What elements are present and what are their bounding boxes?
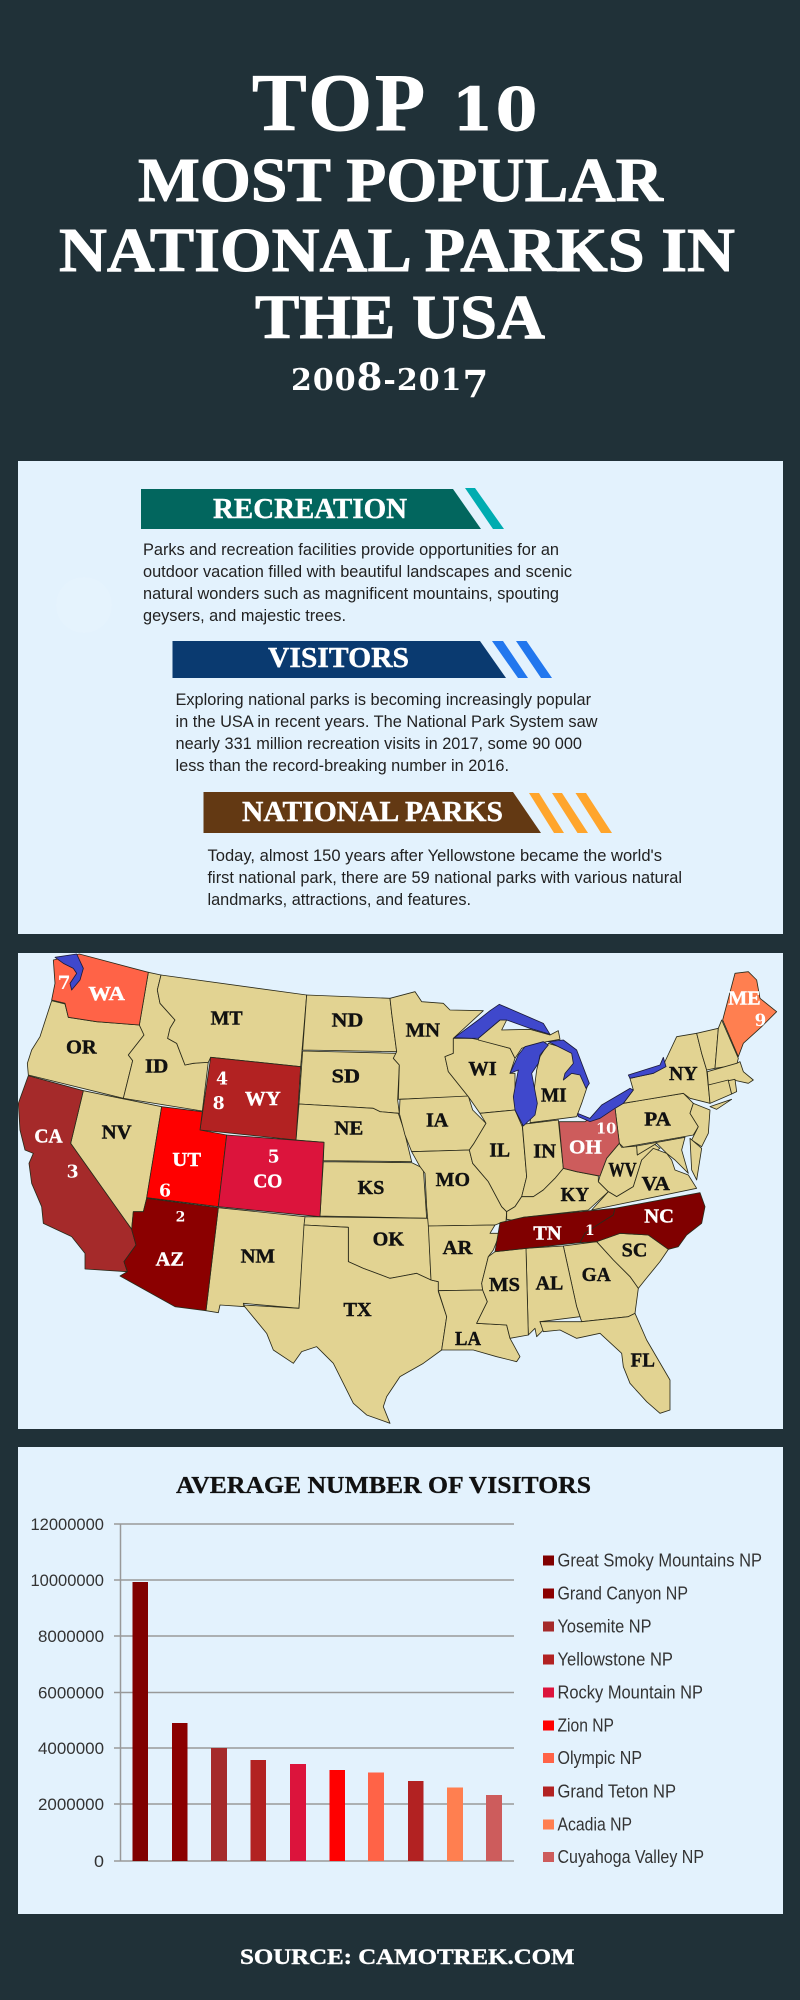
legend: Great Smoky Mountains NP	[558, 1550, 762, 1570]
text: visitors: Exploring national parks is becoming increasingly popular	[176, 690, 591, 709]
rank numbers: 8	[213, 1094, 225, 1114]
tan states	[27, 972, 753, 1423]
legend: Zion NP	[558, 1716, 614, 1736]
title: 10	[452, 75, 540, 144]
state labels: UT	[172, 1149, 202, 1171]
state labels: OK	[373, 1229, 404, 1251]
map of the USA	[18, 954, 777, 1423]
banner: recreation: RECREATION	[213, 493, 407, 525]
state labels: LA	[455, 1328, 482, 1350]
text: national parks	[208, 846, 682, 909]
title: TOP	[252, 57, 424, 148]
state: Washington	[52, 954, 148, 1025]
legend: Grand Canyon NP	[558, 1584, 688, 1604]
banner: visitors	[172, 641, 552, 678]
state labels: NC	[644, 1206, 674, 1228]
banner: national parks: NATIONAL PARKS	[242, 796, 503, 828]
state labels: TX	[343, 1299, 372, 1321]
state: California	[18, 1076, 136, 1272]
state labels: MT	[211, 1007, 243, 1029]
text: visitors: nearly 331 million recreation visits in 2017, some 90 000	[176, 734, 582, 753]
state labels: MI	[541, 1085, 567, 1107]
legend: Acadia NP	[558, 1814, 632, 1834]
state labels: MO	[436, 1169, 470, 1191]
legend	[543, 1550, 762, 1867]
legend: Rocky Mountain NP	[558, 1682, 703, 1702]
gridlines and axis	[114, 1524, 514, 1861]
text: national parks: landmarks, attractions, and features.	[208, 890, 471, 909]
state: Arizona	[120, 1198, 218, 1311]
legend: Grand Teton NP	[558, 1782, 676, 1802]
state: Utah	[147, 1107, 227, 1207]
state labels: NM	[241, 1246, 275, 1268]
state labels: WA	[88, 983, 126, 1005]
text: visitors: less than the record-breaking number in 2016.	[176, 756, 509, 775]
text: recreation	[143, 540, 572, 625]
state labels: CO	[253, 1171, 282, 1193]
rank numbers	[58, 972, 766, 1239]
legend: Olympic NP	[558, 1748, 642, 1768]
state: Tennessee	[495, 1208, 615, 1252]
axis labels: 12000000	[30, 1515, 104, 1534]
state labels: MS	[489, 1274, 520, 1296]
rank numbers: 10	[596, 1120, 616, 1137]
source: SOURCE: CAMOTREK.COM	[240, 1944, 575, 1969]
state labels: IL	[489, 1140, 510, 1162]
legend: Yosemite NP	[558, 1616, 652, 1636]
state labels: FL	[631, 1350, 655, 1372]
great lakes	[55, 954, 666, 1126]
title: THE USA	[255, 284, 545, 352]
state labels: KS	[358, 1177, 384, 1199]
text: recreation: geysers, and majestic trees.	[143, 606, 346, 625]
state labels: GA	[582, 1264, 611, 1286]
state labels: AR	[443, 1237, 473, 1259]
state labels: VA	[642, 1173, 671, 1195]
state labels: NV	[102, 1121, 132, 1143]
banner: recreation	[141, 488, 504, 529]
state labels: AL	[536, 1272, 563, 1294]
panel: introduction	[18, 461, 783, 934]
state labels: MN	[406, 1020, 441, 1042]
text: national parks: first national park, there are 59 national parks with various natural	[208, 868, 682, 887]
title: MOST POPULAR	[138, 147, 664, 215]
state labels: ID	[145, 1055, 168, 1077]
text: visitors: in the USA in recent years. The National Park System saw	[176, 712, 598, 731]
bars	[132, 1582, 502, 1861]
rank numbers: 7	[58, 972, 71, 994]
title: 2008-201	[291, 355, 462, 399]
banner: visitors: VISITORS	[268, 642, 409, 674]
rank numbers: 1	[585, 1223, 595, 1239]
state labels: IN	[533, 1140, 557, 1162]
state labels: AZ	[156, 1249, 184, 1271]
bar chart	[30, 1515, 514, 1871]
state: Maine	[723, 972, 777, 1057]
rank numbers: 2	[176, 1210, 185, 1226]
rank numbers: 4	[216, 1069, 228, 1089]
state labels: WV	[608, 1159, 637, 1181]
rank numbers: 9	[755, 1010, 766, 1030]
text: visitors	[176, 690, 598, 775]
legend: Yellowstone NP	[558, 1650, 673, 1670]
state: Ohio	[559, 1108, 619, 1176]
state labels	[34, 983, 761, 1372]
axis labels	[30, 1515, 104, 1871]
state labels: KY	[561, 1184, 590, 1206]
title: NATIONAL PARKS IN	[59, 217, 735, 285]
rank numbers: 3	[67, 1162, 79, 1182]
state labels: ND	[332, 1010, 363, 1032]
state: Colorado	[218, 1135, 324, 1217]
state labels: OH	[569, 1136, 602, 1158]
state labels: ME	[728, 987, 761, 1009]
panel: map	[18, 953, 783, 1429]
rank numbers: 5	[268, 1147, 280, 1167]
state labels: SC	[622, 1240, 647, 1262]
legend: Cuyahoga Valley NP	[558, 1847, 704, 1867]
rank numbers: 6	[159, 1182, 171, 1202]
axis labels: 6000000	[38, 1684, 104, 1702]
panel: chart	[18, 1447, 783, 1914]
state labels: TN	[533, 1222, 562, 1244]
chart title: AVERAGE NUMBER OF VISITORS	[176, 1473, 591, 1499]
state labels: NY	[669, 1063, 698, 1085]
state labels: CA	[34, 1126, 63, 1148]
axis labels: 10000000	[30, 1571, 104, 1590]
state: Wyoming	[200, 1057, 301, 1140]
state labels: NE	[334, 1117, 363, 1139]
text: recreation: natural wonders such as magnificent mountains, spouting	[143, 584, 559, 603]
text: national parks: Today, almost 150 years after Yellowstone became the world's	[208, 846, 662, 865]
axis labels: 4000000	[38, 1739, 104, 1758]
state labels: PA	[644, 1109, 672, 1131]
state labels: OR	[66, 1036, 97, 1058]
axis labels: 0	[94, 1852, 104, 1871]
text: recreation: outdoor vacation filled with beautiful landscapes and scenic	[143, 562, 572, 581]
banner: national parks	[204, 792, 612, 833]
title: 7	[462, 362, 489, 406]
state: North Carolina	[580, 1193, 705, 1249]
state labels: SD	[332, 1066, 360, 1088]
axis labels: 2000000	[38, 1795, 104, 1814]
state labels: IA	[426, 1110, 449, 1132]
state labels: WY	[245, 1088, 281, 1110]
state labels: WI	[468, 1058, 497, 1080]
title	[59, 57, 735, 406]
axis labels: 8000000	[38, 1627, 104, 1646]
text: recreation: Parks and recreation facilities provide opportunities for an	[143, 540, 559, 559]
